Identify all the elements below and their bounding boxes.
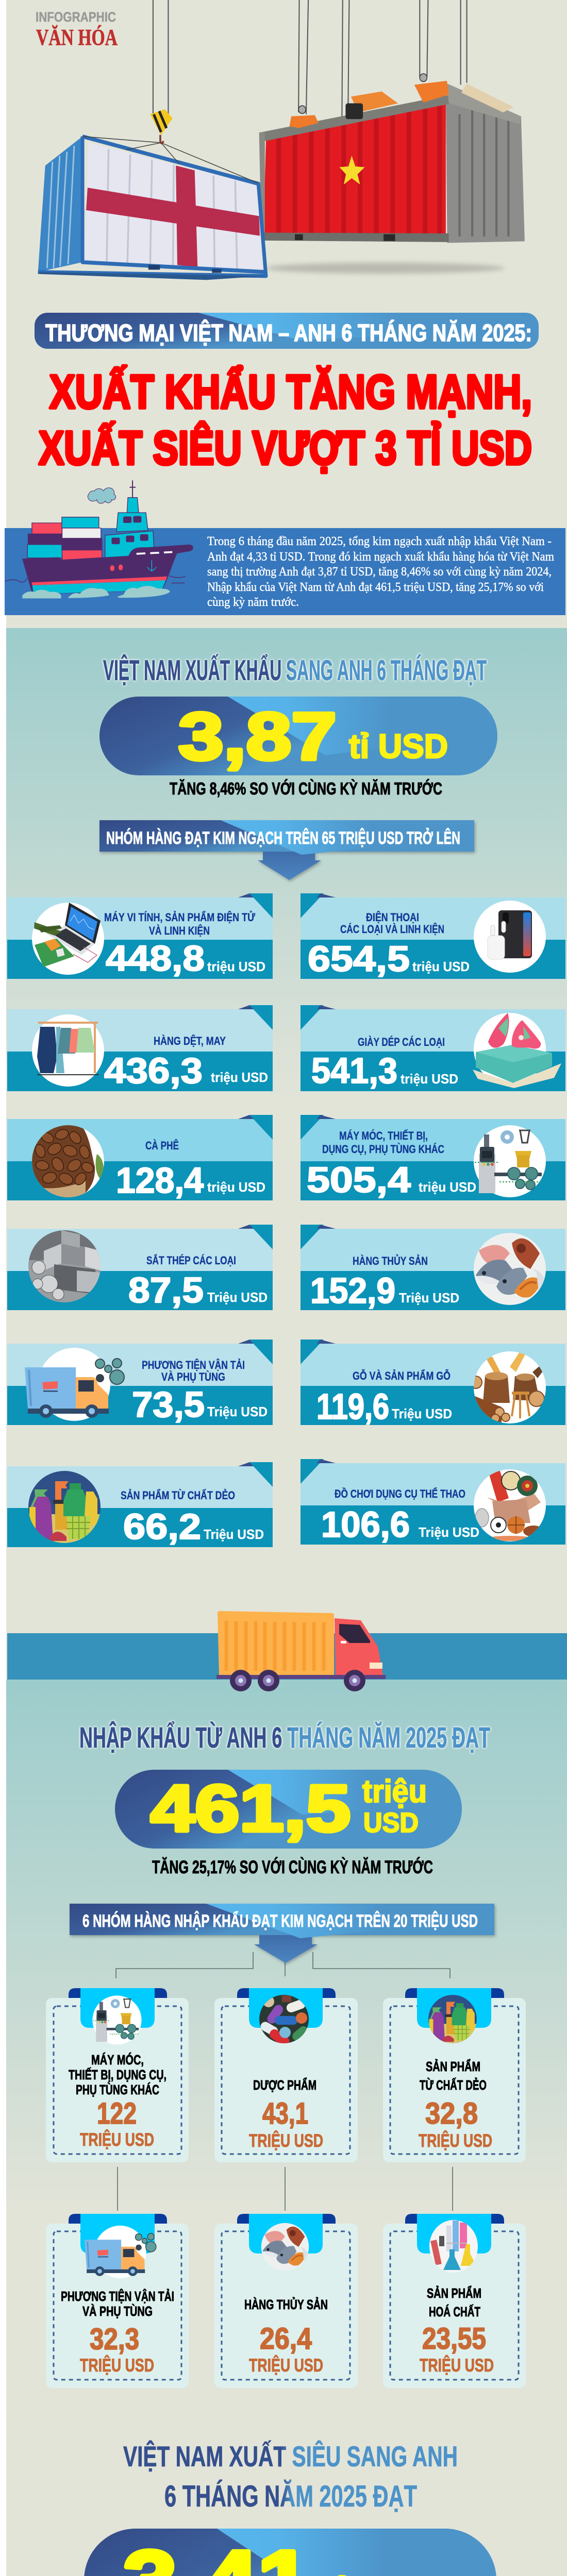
card: footwear [301,1005,565,1091]
label: THIẾT BỊ, DỤNG CỤ, [69,2067,166,2082]
value: 32,3 [90,2323,139,2356]
card: seafood [301,1225,565,1311]
label: VÀ PHỤ TÙNG [161,1370,225,1383]
label: GIÀY DÉP CÁC LOẠI [358,1036,445,1048]
icon: crane cables [153,0,467,116]
icon: plastic products [28,1471,101,1543]
value: Triệu USD [392,1406,452,1421]
value [128,1270,268,1310]
label: HÀNG THỦY SẢN [353,1255,428,1267]
value: triệu USD [412,959,470,974]
icon: crane hook and slings [82,109,258,183]
icon: laptop [32,903,104,975]
label [69,2052,166,2097]
export total pill: tỉ USD [349,727,448,765]
icon: cargo truck [216,1611,386,1691]
value: TRIỆU USD [80,2129,154,2150]
value: TRIỆU USD [249,2355,323,2376]
import card: vehicles [46,2214,189,2388]
value: 654,5 [308,939,410,979]
label: CÀ PHÊ [145,1139,179,1152]
label [420,2059,487,2093]
import total pill: USD [363,1807,419,1838]
section heading: trade surplus [123,2440,458,2513]
icon: shoes on box [473,1013,561,1088]
value: 122 [97,2097,137,2130]
label: GỖ VÀ SẢN PHẨM GỖ [353,1369,451,1382]
icon: plastic products [428,1995,477,2043]
label: DƯỢC PHẨM [253,2077,316,2093]
value [321,1504,479,1545]
label: MÁY MÓC, [91,2052,144,2067]
label: HÀNG THỦY SẢN [244,2296,328,2312]
value: 505,4 [307,1160,411,1200]
value: triệu USD [207,959,265,974]
value: 541,3 [311,1050,397,1091]
import card: machinery [46,1988,189,2162]
value: 152,9 [310,1270,395,1311]
value [80,2323,154,2376]
trade surplus pill [84,2529,496,2576]
label: PHƯƠNG TIỆN VẬN TẢI [142,1359,245,1371]
label: SẮT THÉP CÁC LOẠI [146,1254,236,1267]
icon: coffee beans [31,1125,104,1198]
label: DỤNG CỤ, PHỤ TÙNG KHÁC [322,1143,444,1156]
intro text [207,535,554,609]
value: triệu USD [211,1070,268,1085]
intro text: Nhập khẩu của Việt Nam từ Anh đạt 461,5 triệu USD, tăng 25,17% so với [207,581,544,594]
value: TRIỆU USD [419,2130,492,2151]
value: TRIỆU USD [80,2355,154,2376]
value [132,1384,268,1425]
value [123,1506,264,1547]
label: MÁY MÓC, THIẾT BỊ, [339,1129,428,1142]
card: wood [301,1340,565,1427]
value: 32,8 [425,2097,478,2130]
import total pill: triệu [362,1774,427,1809]
icon: clothes rack [32,1014,104,1087]
icon: wood logs [470,1351,547,1423]
import total pill: 461,5 [151,1772,351,1845]
card: plastics [7,1462,273,1547]
label: SẢN PHẨM [427,2285,481,2301]
label [427,2285,481,2319]
value: 26,4 [260,2322,312,2355]
label [104,911,256,937]
truck divider band [7,1633,567,1680]
value: triệu USD [419,1179,476,1195]
value: 43,1 [262,2097,308,2130]
value: 119,6 [316,1386,389,1427]
value [419,2097,492,2151]
value [249,2322,323,2376]
icon: delivery truck [25,1348,124,1421]
label: PHƯƠNG TIỆN VẬN TẢI [61,2289,174,2304]
value: 87,5 [128,1270,204,1310]
icon: chemical flasks [429,2220,478,2273]
value: TRIỆU USD [249,2130,323,2151]
label: ĐIỆN THOẠI [366,911,419,924]
icon: cargo ship [5,480,193,599]
label: VÀ LINH KIỆN [149,924,210,937]
export total pill [99,697,497,775]
value: 448,8 [106,938,205,978]
value: Triệu USD [207,1404,268,1419]
label: HÀNG DỆT, MAY [154,1035,226,1047]
export growth note: TĂNG 8,46% SO VỚI CÙNG KỲ NĂM TRƯỚC [170,779,442,798]
value [80,2097,154,2150]
value [104,1050,268,1091]
value [307,1160,476,1200]
import total pill [115,1770,462,1849]
card: coffee [7,1115,273,1200]
label: TỪ CHẤT DẺO [420,2077,487,2093]
label [142,1359,245,1383]
main title [39,365,532,474]
icon: container shadow [266,263,505,274]
logo: Infographic Văn Hóa [36,9,118,50]
value [116,1160,265,1200]
icon: toys box [474,1469,546,1541]
import card: pharmaceuticals [214,1988,358,2162]
import card: seafood [214,2214,358,2388]
value [316,1386,452,1427]
intro panel [5,480,565,615]
value: 73,5 [132,1384,205,1425]
label: ĐỒ CHƠI DỤNG CỤ THỂ THAO [335,1487,465,1500]
card: steel [7,1225,273,1310]
value [249,2097,323,2151]
value: 128,4 [116,1160,204,1200]
value [311,1050,458,1091]
icon: seafood [474,1233,546,1305]
label: PHỤ TÙNG KHÁC [76,2082,159,2097]
import growth note: TĂNG 25,17% SO VỚI CÙNG KỲ NĂM TRƯỚC [152,1857,433,1877]
value: 66,2 [123,1506,201,1547]
value [308,939,470,979]
icon: Vietnam flag container [259,74,525,243]
label [340,911,444,936]
value: Triệu USD [419,1524,479,1540]
import card: chemicals [383,2214,526,2388]
label: SẢN PHẨM [426,2059,480,2074]
value: 23,55 [422,2322,486,2355]
value: triệu USD [401,1071,458,1087]
icon: pills [259,1995,310,2048]
value: Triệu USD [399,1290,459,1306]
intro text: Trong 6 tháng đầu năm 2025, tổng kim ngạch xuất nhập khẩu Việt Nam - [207,535,552,548]
intro text: cùng kỳ năm trước. [207,596,299,609]
section heading: trade surplus: 6 THÁNG NĂM 2025 ĐẠT [164,2480,417,2513]
icon: machine [92,1995,142,2045]
card: toys and sports [301,1459,565,1545]
import card: plastics [383,1988,526,2162]
label: HOÁ CHẤT [429,2304,480,2319]
value: 436,3 [104,1050,203,1091]
banner: export groups [99,820,474,880]
export total pill: 3,87 [178,699,337,774]
label: SẢN PHẨM TỪ CHẤT DẺO [121,1489,235,1502]
card: machinery [301,1115,565,1200]
label: CÁC LOẠI VÀ LINH KIỆN [340,923,444,936]
icon: England flag container [38,137,266,280]
logo: Infographic Văn Hóa: VĂN HÓA [36,25,118,50]
value: Triệu USD [204,1527,264,1542]
label [61,2289,174,2319]
value [310,1270,459,1311]
icon: phone and earbuds [474,901,546,973]
connector lines [116,1952,453,2211]
card: computers [7,893,273,979]
title band [35,313,539,349]
value: triệu USD [207,1179,265,1195]
icon: seafood [261,2223,309,2270]
icon: steel bars [27,1229,102,1302]
label: VÀ PHỤ TÙNG [82,2303,153,2319]
value: Triệu USD [207,1290,268,1305]
hero illustration: England and Vietnam containers on cranes [38,0,525,280]
value: 106,6 [321,1504,410,1545]
value [420,2322,494,2376]
card: vehicles [7,1340,273,1425]
value: TRIỆU USD [420,2355,494,2376]
icon: cloud [88,488,116,503]
label [322,1129,444,1156]
icon: delivery truck [85,2226,156,2278]
icon: machine [474,1125,546,1197]
card: textiles [7,1005,273,1091]
banner: import groups [70,1904,494,1963]
label: MÁY VI TÍNH, SẢN PHẨM ĐIỆN TỬ [104,911,256,924]
card: phones [301,893,565,979]
value [106,938,265,978]
logo: Infographic Văn Hóa: INFOGRAPHIC [36,9,116,25]
